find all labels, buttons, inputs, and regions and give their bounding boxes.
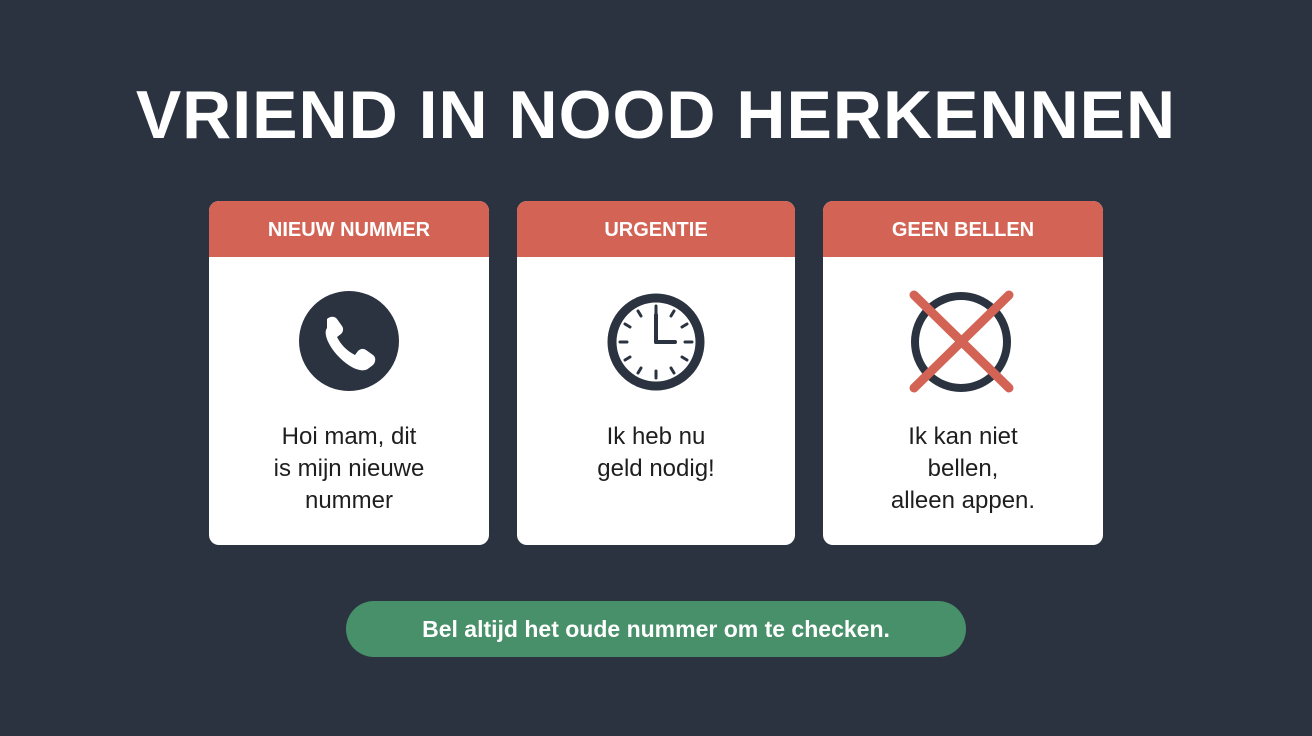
header: urgentie: URGENTIE — [604, 219, 708, 241]
header: nieuw nummer — [209, 201, 489, 257]
text — [274, 423, 424, 514]
text: is mijn nieuwe — [274, 455, 424, 482]
panel: nieuw nummer — [209, 201, 489, 545]
text: Ik heb nu — [607, 423, 705, 450]
panel: urgentie — [517, 201, 795, 545]
header: geen bellen — [823, 201, 1103, 257]
callout button — [346, 601, 966, 657]
text: bellen, — [928, 455, 998, 482]
header: nieuw nummer: NIEUW NUMMER — [268, 219, 430, 241]
header: urgentie — [517, 201, 795, 257]
panel: geen bellen — [823, 201, 1103, 545]
header: geen bellen: GEEN BELLEN — [892, 219, 1034, 241]
text: nummer — [305, 487, 393, 514]
icon: phone — [299, 291, 399, 391]
icon: crossed circle — [910, 290, 1014, 392]
text — [891, 423, 1035, 514]
text: geld nodig! — [597, 455, 715, 482]
text: Hoi mam, dit — [282, 423, 416, 450]
text: Ik kan niet — [908, 423, 1018, 450]
title: VRIEND IN NOOD HERKENNEN — [136, 77, 1176, 153]
text — [597, 423, 715, 482]
text: alleen appen. — [891, 487, 1035, 514]
icon: clock — [608, 294, 704, 390]
callout button: Bel altijd het oude nummer om te checken. — [422, 616, 890, 642]
